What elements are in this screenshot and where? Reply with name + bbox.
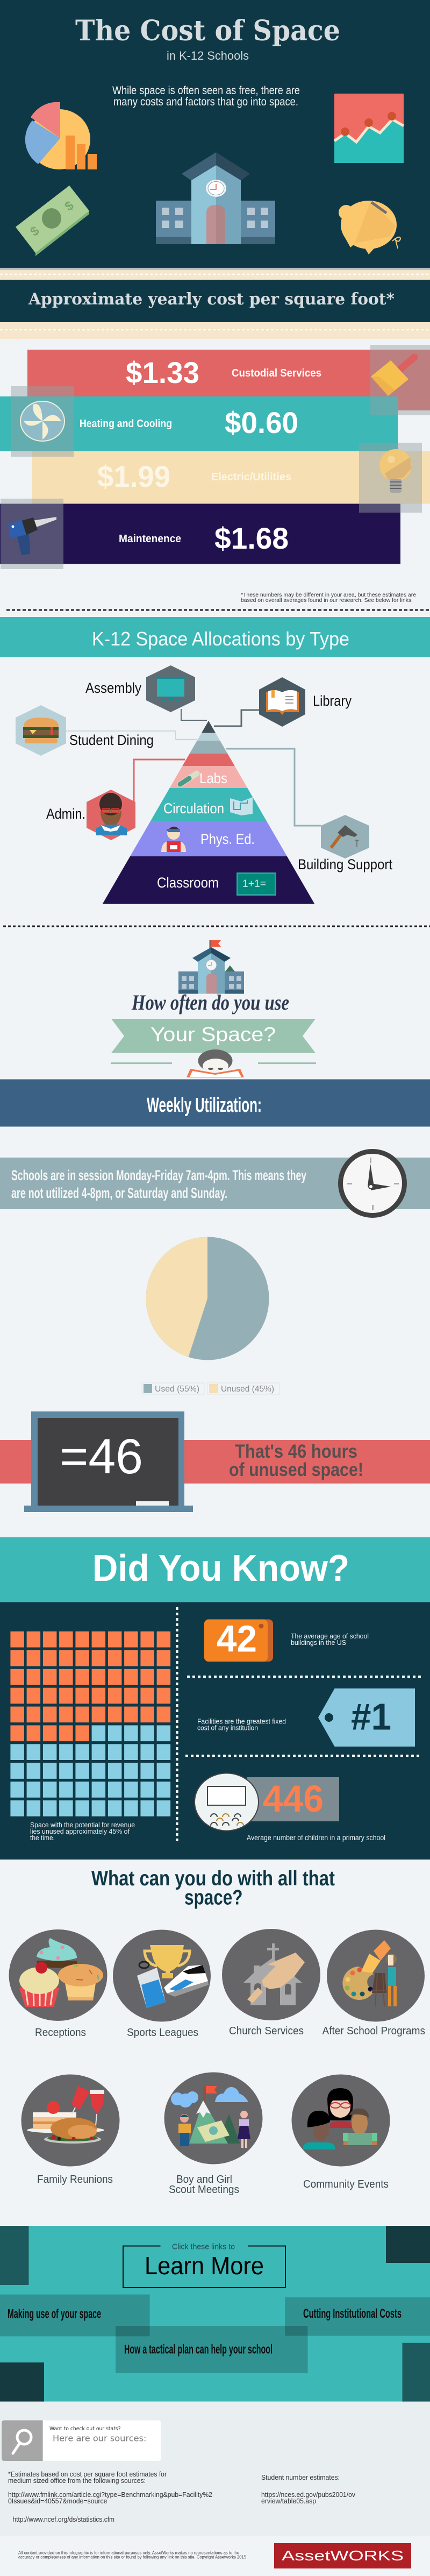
panel: school schedule: [0, 1149, 430, 1218]
waffle chart: [10, 1631, 170, 1816]
custodial services row: Custodial Services: [232, 367, 321, 379]
ribbon: Your Space?: [150, 1024, 276, 1046]
icon: chalkboard: [236, 872, 276, 896]
label: scout meetings: [169, 2174, 239, 2196]
hexagon: assembly: [146, 665, 195, 712]
label: receptions: Receptions: [35, 2027, 86, 2039]
learn more box: Click these links to: [172, 2243, 235, 2252]
label: admin: Admin.: [46, 806, 85, 822]
logo: AssetWorks: AssetWORKS: [282, 2547, 404, 2564]
panel: sources: [0, 2402, 430, 2536]
icon: clock: [338, 1149, 407, 1218]
student number sources text: erview/table05.asp: [261, 2497, 316, 2505]
maintenance row: Maintenence: [119, 533, 181, 545]
panel: learn more: [0, 2226, 430, 2402]
legend: Used (55%): [155, 1385, 199, 1394]
label: assembly: Assembly: [85, 680, 141, 696]
footnote: *These numbers may be different in your area, but these estimates are: [241, 592, 416, 598]
pie chart: used vs unused: [146, 1237, 269, 1360]
label: family reunions: Family Reunions: [37, 2174, 113, 2185]
stat: number one fixed cost: Facilities are the greatest fixed: [197, 1717, 286, 1726]
footnote: based on overall averages found in our research. See below for links.: [241, 598, 413, 604]
label: after school programs: After School Programs: [322, 2025, 425, 2037]
callout text: [229, 1441, 363, 1480]
label: sports leagues: Sports Leagues: [127, 2027, 198, 2039]
link: tactical plan: [116, 2326, 307, 2373]
circle: community events: [291, 2074, 390, 2167]
cost sources text: *Estimates based on cost per square foot estimates for: [8, 2471, 167, 2478]
heating and cooling row: [80, 406, 298, 439]
script heading: How often do you use: [131, 990, 289, 1014]
title: The Cost of Space: [75, 15, 340, 47]
hexagon: admin: [87, 790, 135, 840]
subtitle: in K-12 Schools: [167, 49, 249, 62]
legend: Unused (45%): [221, 1385, 274, 1394]
custodial services row: $1.33: [126, 356, 199, 389]
panel: weekly utilization heading: Weekly Utilization:: [147, 1094, 262, 1117]
sources search box: Want to check out our stats?: [49, 2426, 120, 2432]
waffle caption: [30, 1821, 135, 1842]
stat: 446 children: 446: [263, 1778, 324, 1820]
pyramid labels: [157, 770, 255, 891]
panel: unused hours callout: [0, 1411, 430, 1512]
circle: after school programs: [327, 1930, 425, 2021]
panel: did you know heading: [0, 1537, 430, 1602]
heading: what can you do: space?: [184, 1886, 243, 1910]
panel: space allocations: [0, 617, 430, 904]
icon: athlete: [161, 827, 186, 852]
label: scout meetings: Boy and Girl: [176, 2174, 232, 2185]
pyramid labels: Labs: [199, 770, 227, 786]
icon: school building: [156, 152, 275, 244]
student number sources text: Student number estimates:: [261, 2474, 340, 2481]
cost sources text: http://www.fmlink.com/article.cgi?type=Benchmarking&pub=Facility%2: [8, 2491, 212, 2499]
electric utilities row: [97, 459, 291, 493]
icon: chalkboard: 1+1=: [242, 878, 266, 890]
icon: line chart card: [334, 94, 404, 163]
cost sources text: [8, 2471, 212, 2523]
circle: receptions: [9, 1929, 108, 2021]
maintenance row: $1.68: [214, 521, 289, 555]
panel: cost per square foot banner: [0, 269, 430, 339]
icon: dollar bill: $: [27, 223, 42, 239]
hexagon: student dining: [16, 705, 66, 756]
stat: number one fixed cost: #1: [351, 1696, 391, 1738]
intro text: While space is often seen as free, there are: [112, 84, 300, 97]
stat: 446 children: [195, 1773, 385, 1842]
circle: family reunions: [22, 2074, 119, 2167]
cost sources text: medium sized office from the following sources:: [8, 2477, 146, 2485]
panel: did you know facts: [0, 1602, 430, 1860]
electric utilities row: Electric/Utilities: [211, 471, 291, 483]
heading: K-12 Space Allocations by Type: [92, 628, 349, 650]
panel: cost bars: [0, 345, 430, 604]
icon: blackboard: [24, 1411, 193, 1512]
link: tactical plan: How a tactical plan can help your school: [124, 2342, 273, 2357]
stat: 446 children: Average number of children in a primary school: [247, 1834, 385, 1842]
intro text: [112, 84, 300, 108]
icon: light bulb: [359, 443, 422, 513]
label: library: Library: [313, 693, 352, 709]
cost sources text: 0Issues&id=40557&mode=source: [8, 2497, 108, 2505]
icon: reading student: [187, 1049, 244, 1077]
electric utilities row: $1.99: [97, 459, 170, 493]
cost sources text: http://www.ncef.org/ds/statistics.cfm: [13, 2516, 114, 2523]
hexagon: library: [259, 677, 305, 727]
learn more box: Learn More: [145, 2252, 264, 2280]
waffle caption: the time.: [30, 1834, 55, 1842]
icon: dollar bill: $: [62, 198, 77, 214]
intro text: many costs and factors that go into space.: [113, 96, 298, 108]
legal disclaimer: All content provided on this infographic is for informational purposes only. AssetWorks makes no representations as to the: [18, 2550, 239, 2556]
schedule text: [11, 1167, 306, 1201]
stat: average age 42: [204, 1618, 369, 1662]
legal disclaimer: accuracy or completeness of any information on this site or found by following any link on this site. Copyright Assetworks 2015: [18, 2554, 246, 2560]
panel: header: [0, 0, 430, 268]
pyramid labels: Phys. Ed.: [200, 831, 255, 847]
custodial services row: [126, 356, 321, 389]
student number sources text: [261, 2474, 356, 2505]
callout text: of unused space!: [229, 1459, 363, 1480]
sources search box: [2, 2421, 161, 2461]
link: making use of your space: Making use of your space: [8, 2307, 101, 2321]
legal disclaimer: [18, 2550, 246, 2560]
ribbon: [111, 1019, 316, 1053]
connector lines: [66, 709, 321, 826]
pyramid labels: Classroom: [157, 875, 219, 891]
stat: number one fixed cost: [197, 1688, 415, 1747]
waffle caption: lies unused approximately 45% of: [30, 1827, 130, 1835]
icon: drill: [1, 499, 63, 569]
schedule text: are not utilized 4-8pm, or Saturday and Sunday.: [11, 1185, 227, 1201]
icon: test tube: [180, 773, 197, 784]
panel: how often do you use your space: [111, 940, 316, 1077]
learn more box: [123, 2243, 285, 2288]
callout text: That's 46 hours: [235, 1441, 357, 1462]
icon: map: [230, 797, 253, 815]
heading: Approximate yearly cost per square foot*: [28, 290, 395, 309]
link: making use of your space: [0, 2295, 150, 2336]
student number sources text: https://nces.ed.gov/pubs2001/ov: [261, 2491, 356, 2499]
heading: what can you do: What can you do with all that: [91, 1867, 335, 1890]
label: church services: Church Services: [229, 2025, 304, 2037]
circle: church services: [222, 1929, 320, 2020]
icon: paint brush: [370, 345, 430, 415]
waffle caption: Space with the potential for revenue: [30, 1821, 135, 1829]
pyramid labels: Circulation: [163, 800, 224, 817]
icon: fan: [11, 386, 74, 457]
link: cutting institutional costs: [285, 2297, 430, 2336]
stat: average age 42: 42: [217, 1618, 257, 1660]
label: student dining: Student Dining: [69, 732, 154, 748]
footnote: [241, 592, 416, 604]
label: community events: Community Events: [303, 2178, 389, 2190]
icon: pie and bar chart: [25, 102, 97, 169]
heating and cooling row: Heating and Cooling: [80, 418, 172, 430]
sources search box: Here are our sources:: [53, 2433, 146, 2444]
panel: weekly utilization heading: [0, 1079, 430, 1126]
stat: number one fixed cost: cost of any institution: [197, 1723, 258, 1732]
stat: average age 42: The average age of school: [291, 1632, 369, 1640]
logo: AssetWorks: [274, 2543, 411, 2568]
icon: dollar bill: [16, 186, 89, 256]
label: building support: Building Support: [298, 856, 392, 872]
icon: piggy bank: [339, 201, 400, 254]
stat: average age 42: buildings in the US: [291, 1638, 346, 1647]
circle: sports leagues: [113, 1930, 211, 2021]
panel: did you know heading: Did You Know?: [92, 1547, 349, 1589]
circle: scout meetings: [164, 2072, 262, 2165]
label: scout meetings: Scout Meetings: [169, 2184, 239, 2196]
legend: [142, 1383, 280, 1394]
pyramid chart: [103, 721, 314, 904]
icon: blackboard: =46: [60, 1429, 143, 1484]
heading: what can you do: [91, 1867, 335, 1910]
maintenance row: [119, 521, 289, 555]
icon: small school: [178, 940, 244, 994]
heating and cooling row: $0.60: [225, 406, 298, 439]
hexagon: building support: [321, 815, 369, 858]
